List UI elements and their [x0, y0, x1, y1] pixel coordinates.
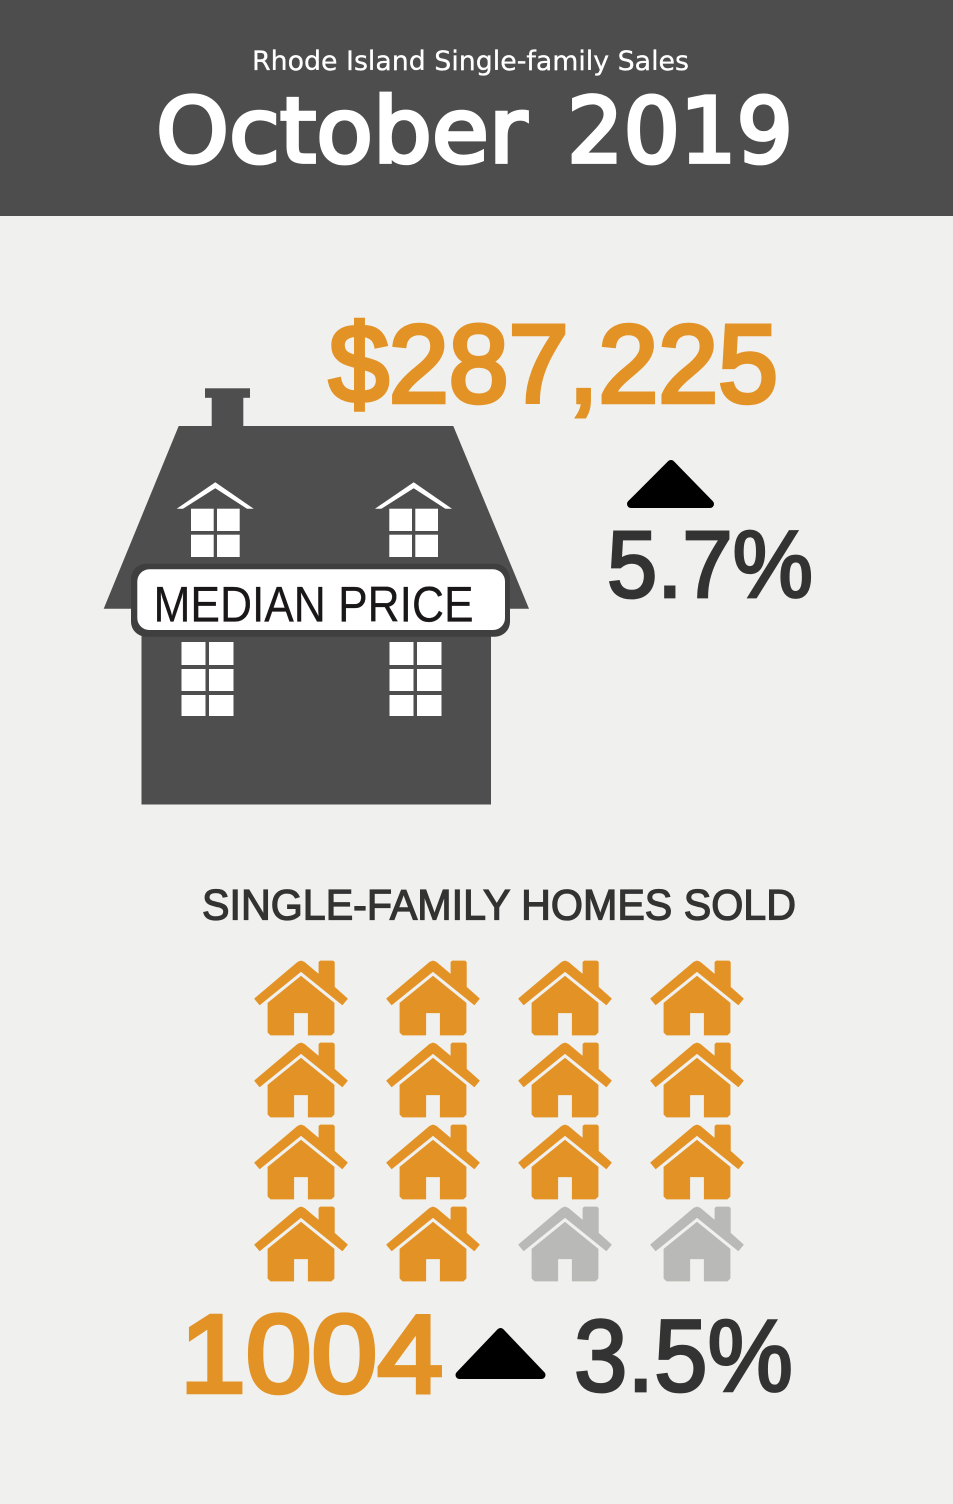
header band: [0, 0, 953, 216]
median price value: $287,225: [329, 303, 778, 426]
icon: up arrow sales: [460, 1332, 542, 1375]
homes sold value: 1004: [180, 1293, 443, 1416]
dormer left: [177, 482, 254, 557]
lower window right: [390, 642, 442, 716]
dormer right: [375, 482, 452, 557]
icon: large house: [104, 388, 529, 804]
title: October: [156, 79, 527, 184]
lower window left: [182, 642, 234, 716]
median price label: MEDIAN PRICE: [154, 576, 474, 632]
homes sold heading: SINGLE-FAMILY HOMES SOLD: [202, 882, 796, 930]
price change: 5.7%: [607, 512, 813, 618]
sales change: 3.5%: [574, 1299, 793, 1413]
pictogram: homes sold: [255, 961, 743, 1281]
subtitle: Rhode Island Single-family Sales: [252, 46, 689, 77]
title: 2019: [567, 79, 793, 184]
icon: up arrow price: [631, 464, 710, 504]
title: [156, 79, 793, 184]
